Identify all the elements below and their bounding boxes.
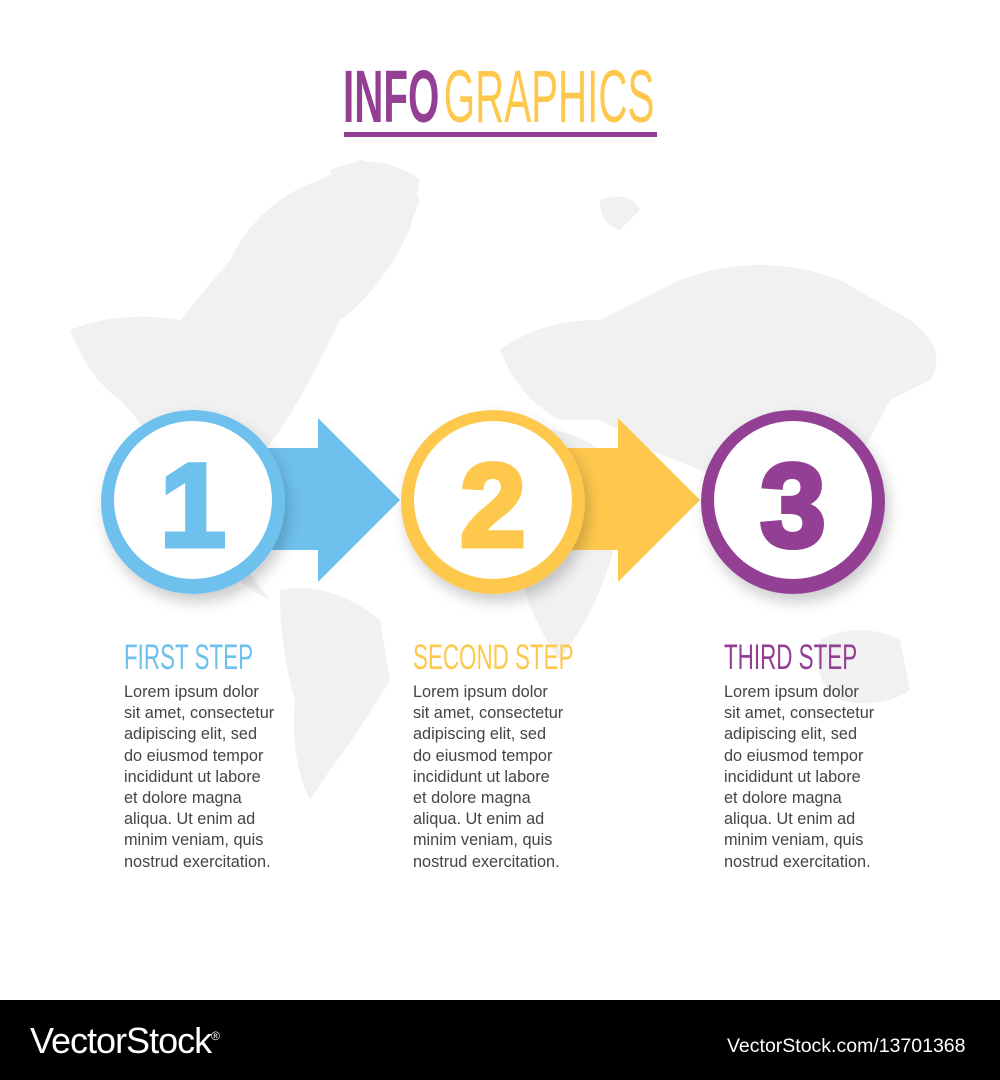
footer logo: VectorStock® bbox=[30, 1020, 219, 1061]
body text 1: adipiscing elit, sed bbox=[124, 725, 257, 743]
body text 2: nostrud exercitation. bbox=[413, 853, 560, 871]
body text 1: sit amet, consectetur bbox=[124, 704, 274, 722]
heading: third step: THIRD STEP bbox=[724, 638, 857, 677]
body text 2: Lorem ipsum dolor bbox=[413, 683, 548, 701]
circle 3 bbox=[701, 410, 885, 594]
arrow 2 bbox=[560, 418, 700, 582]
body text 2: minim veniam, quis bbox=[413, 831, 552, 849]
body text 3: et dolore magna bbox=[724, 789, 842, 807]
circle 1: 1 bbox=[160, 440, 226, 572]
steps diagram bbox=[98, 410, 896, 608]
arrow 1 bbox=[260, 418, 400, 582]
body text 2: adipiscing elit, sed bbox=[413, 725, 546, 743]
footer bar bbox=[0, 1000, 1000, 1080]
body text 1: et dolore magna bbox=[124, 789, 242, 807]
body text 2: incididunt ut labore bbox=[413, 768, 550, 786]
heading: second step: SECOND STEP bbox=[413, 638, 574, 677]
body text 3: do eiusmod tempor bbox=[724, 747, 863, 765]
body text 3: Lorem ipsum dolor bbox=[724, 683, 859, 701]
body text 1: aliqua. Ut enim ad bbox=[124, 810, 255, 828]
body text 3: minim veniam, quis bbox=[724, 831, 863, 849]
circle 2: 2 bbox=[460, 440, 526, 572]
body text 1: minim veniam, quis bbox=[124, 831, 263, 849]
body text 1: incididunt ut labore bbox=[124, 768, 261, 786]
body text 2: do eiusmod tempor bbox=[413, 747, 552, 765]
circle 2 bbox=[401, 410, 585, 594]
body text 3: aliqua. Ut enim ad bbox=[724, 810, 855, 828]
body text 2 bbox=[413, 683, 563, 871]
body text 2: sit amet, consectetur bbox=[413, 704, 563, 722]
heading: first step: FIRST STEP bbox=[124, 638, 253, 677]
body text 2: aliqua. Ut enim ad bbox=[413, 810, 544, 828]
step 2 text bbox=[413, 638, 574, 871]
body text 3: sit amet, consectetur bbox=[724, 704, 874, 722]
body text 3: adipiscing elit, sed bbox=[724, 725, 857, 743]
footer url: VectorStock.com/13701368 bbox=[727, 1035, 966, 1057]
title: INFOGRAPHICS bbox=[343, 55, 654, 138]
body text 1: Lorem ipsum dolor bbox=[124, 683, 259, 701]
body text 1 bbox=[124, 683, 274, 871]
body text 2: et dolore magna bbox=[413, 789, 531, 807]
step 1 text bbox=[124, 638, 274, 871]
body text 3 bbox=[724, 683, 874, 871]
body text 1: do eiusmod tempor bbox=[124, 747, 263, 765]
circle 3: 3 bbox=[760, 440, 826, 572]
body text 3: nostrud exercitation. bbox=[724, 853, 871, 871]
circle 1 bbox=[101, 410, 285, 594]
body text 1: nostrud exercitation. bbox=[124, 853, 271, 871]
step 3 text bbox=[724, 638, 874, 871]
body text 3: incididunt ut labore bbox=[724, 768, 861, 786]
